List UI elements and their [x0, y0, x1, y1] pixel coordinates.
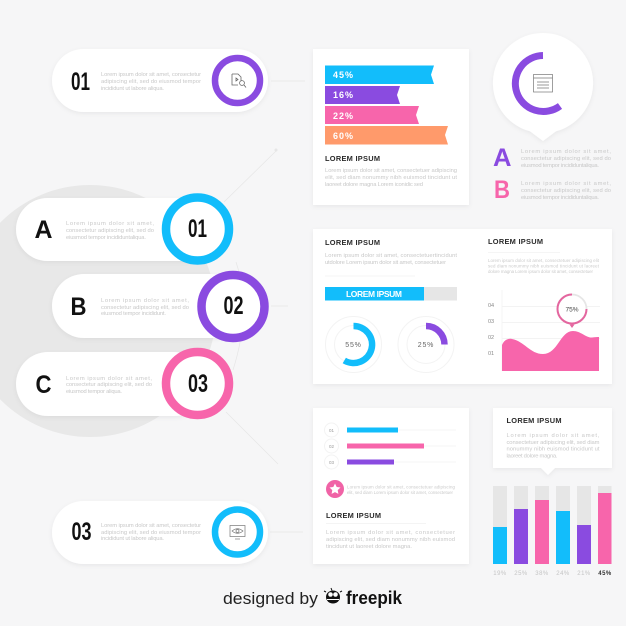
icon: browser window [534, 74, 552, 92]
description: incididunt ut labore aliqua. [101, 86, 164, 92]
legend B: B [494, 176, 510, 204]
icon: freepik bee [324, 588, 342, 604]
axis labels [488, 303, 494, 357]
ribbon 16% [325, 86, 400, 104]
option pill B [52, 274, 242, 338]
axis labels: 03 [488, 319, 494, 325]
callout 75% [557, 294, 587, 328]
bar chart [493, 486, 612, 577]
step pill 01 [52, 49, 268, 112]
speech bubble with ring [493, 33, 593, 141]
body text: elit, sed diam nonummy nibh euismod tincidunt ut [325, 175, 457, 181]
body text: Lorem ipsum dolor sit amet, [506, 433, 600, 439]
bar 19%: 19% [493, 571, 507, 577]
icon: star badge [326, 480, 344, 498]
heading right: LOREM IPSUM [488, 237, 543, 246]
description [101, 72, 201, 92]
description [101, 298, 189, 317]
icon: document search [232, 74, 246, 88]
legend A: Lorem ipsum dolor sit amet, [521, 149, 611, 155]
legend A: consectetur adipiscing elit, sed do [521, 156, 611, 162]
body text: laoreet dolore magna Lorem iconidic sed [325, 182, 423, 188]
body text: nonummy nibh euismod tincidunt ut [506, 446, 600, 452]
row 01 [324, 423, 456, 437]
ribbon 22%: 22% [333, 111, 354, 121]
bar 24%: 24% [556, 571, 570, 577]
row 02 [324, 439, 456, 453]
body text [325, 168, 457, 188]
description: consectetur adipiscing elit, sed do [101, 305, 189, 311]
blue ring 01 [166, 198, 229, 260]
ribbon 22% [325, 106, 419, 124]
donut 25%: 25% [418, 342, 434, 349]
progress bar: LOREM IPSUM [346, 289, 402, 299]
heading: LOREM IPSUM [326, 511, 381, 520]
description: Lorem ipsum dolor sit amet, [66, 221, 154, 227]
note text: Lorem ipsum dolor sit amet, consectetuer adipiscing [347, 484, 456, 490]
legend B: Lorem ipsum dolor sit amet, [521, 181, 611, 187]
heading: LOREM IPSUM [325, 154, 380, 163]
row 02: 02 [329, 444, 334, 449]
legend A [493, 144, 611, 172]
step pill 03 [52, 501, 268, 564]
panel: ribbon chart [313, 49, 469, 205]
footer credit: designed by [223, 589, 319, 608]
footer credit: freepik [346, 588, 403, 608]
body text: Lorem ipsum dolor sit amet, consectetuer [326, 530, 455, 536]
row 03: 03 [329, 460, 334, 465]
description: Lorem ipsum dolor sit amet, [101, 298, 189, 304]
ribbon 45% [325, 66, 434, 84]
ribbon 60% [325, 126, 448, 144]
option pill C [16, 352, 206, 416]
axis labels: 02 [488, 335, 494, 341]
body text [326, 530, 455, 550]
icon: monitor eye [230, 526, 245, 539]
axis labels: 01 [488, 351, 494, 357]
letter C: C [36, 371, 52, 399]
body text: adipiscing elit, sed diam nonummy nibh euismod [326, 537, 455, 543]
number 03: 03 [72, 518, 92, 546]
panel: horizontal bars [313, 408, 469, 564]
legend A: A [493, 144, 512, 172]
number 01: 01 [71, 68, 90, 96]
purple ring 02: 02 [224, 292, 244, 320]
donut 55% [326, 316, 382, 372]
legend B: consectetur adipiscing elit, sed do [521, 188, 611, 194]
pink ring 03: 03 [188, 370, 208, 398]
description [66, 221, 154, 241]
background blob [0, 185, 216, 437]
panel: progress and area chart [313, 229, 612, 384]
purple ring 02 [202, 275, 264, 338]
blue ring [215, 510, 260, 554]
description: adipiscing elit, sed do eiusmod tempor [101, 530, 201, 536]
option pill A [16, 198, 216, 261]
body text: Lorem ipsum dolor sit amet, consectetuer adipiscing [325, 168, 457, 174]
donut 55%: 55% [345, 342, 362, 349]
description: incididunt ut labore aliqua. [101, 536, 164, 542]
axis labels: 04 [488, 303, 494, 309]
heading: LOREM IPSUM [506, 416, 562, 425]
ribbon 16%: 16% [333, 90, 354, 100]
note text: elit, sed diam Lorem ipsum dolor sit amet, consectetuer [347, 490, 454, 495]
heading: LOREM IPSUM [325, 238, 380, 247]
description: Lorem ipsum dolor sit amet, [66, 376, 152, 382]
letter B: B [70, 293, 86, 321]
row 01: 01 [329, 428, 334, 433]
legend A: eiusmod tempor incididuntaliqua. [521, 163, 599, 169]
bar 25%: 25% [514, 571, 528, 577]
small body text: sed diam nonummy nibh euismod tincidunt ut laoreet [488, 264, 600, 268]
body text: utdolore Lorem ipsum dolor sit amet, consectetuer [325, 260, 446, 266]
body text: consectetuer adipiscing elit, sed diam [506, 440, 600, 446]
connector lines [224, 81, 305, 532]
blue ring 01: 01 [188, 215, 207, 243]
letter A: A [34, 216, 52, 244]
bar 38%: 38% [535, 571, 549, 577]
ribbon 45%: 45% [333, 70, 354, 80]
description [101, 523, 201, 542]
legend B [494, 176, 611, 204]
body text: tincidunt ut laoreet dolore magna. [326, 544, 412, 550]
small body text [488, 258, 600, 274]
legend B: eiusmod tempor incididuntaliqua. [521, 195, 599, 201]
description [66, 376, 152, 395]
ribbon 60%: 60% [333, 131, 354, 141]
description: Lorem ipsum dolor sit amet, consectetur [101, 72, 201, 78]
body text: laoreet dolore magna. [506, 454, 558, 460]
bar 21%: 21% [577, 571, 591, 577]
bar 45%: 45% [598, 571, 612, 577]
footer credit [223, 588, 403, 608]
small body text: dolore magna Lorem ipsum dolor sit amet, consectetuer [488, 269, 594, 274]
description: consectetur adipiscing elit, sed do [66, 382, 152, 388]
callout panel [493, 408, 612, 475]
description: adipiscing elit, sed do eiusmod tempor [101, 79, 201, 85]
description: eiusmod tempor incididuntaliqua. [66, 235, 146, 241]
description: Lorem ipsum dolor sit amet, consectetur [101, 523, 201, 529]
donut 25% [398, 316, 454, 372]
progress bar [325, 287, 457, 300]
purple arc [515, 56, 560, 111]
pink ring 03 [166, 352, 229, 415]
callout 75%: 75% [565, 306, 579, 314]
area chart [488, 290, 600, 371]
note text [347, 484, 456, 495]
body text: Lorem ipsum dolor sit amet, consectetuertincidunt [325, 253, 457, 259]
purple ring [215, 58, 260, 103]
body text [325, 253, 457, 266]
description: consectetur adipiscing elit, sed do [66, 228, 154, 234]
body text [506, 433, 600, 460]
description: eiusmod tempor aliqua. [66, 389, 122, 395]
row 03 [324, 455, 456, 469]
description: eiusmod tempor incididunt. [101, 311, 166, 317]
small body text: Lorem ipsum dolor sit amet, consectetuer adipiscing elit [488, 258, 600, 263]
